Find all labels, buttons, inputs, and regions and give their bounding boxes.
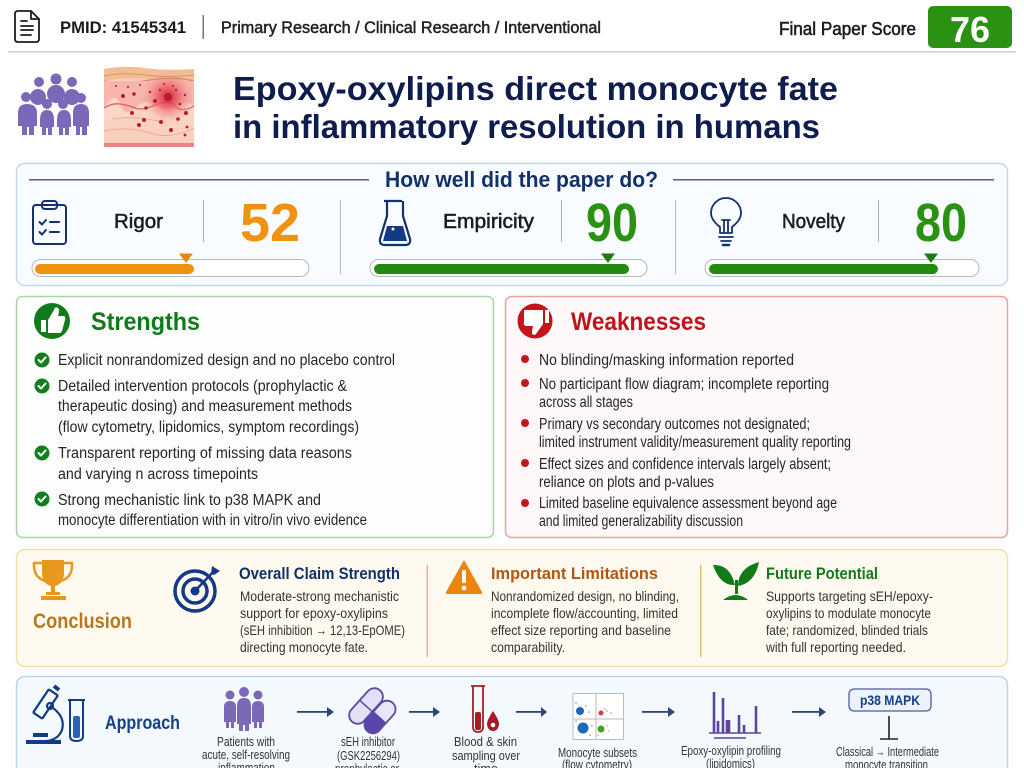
panel: conclusion bbox=[16, 550, 1008, 666]
bar: rigor bbox=[32, 254, 309, 276]
panel: weaknesses bbox=[506, 296, 1008, 538]
arrow bbox=[642, 707, 675, 717]
weaknesses heading: Weaknesses bbox=[571, 308, 706, 336]
step: sEH inhibitor bbox=[335, 685, 400, 768]
weaknesses list: limited instrument validity/measurement quality reporting bbox=[539, 434, 851, 451]
step: sEH inhibitor: sEH inhibitor bbox=[341, 735, 395, 749]
weaknesses list: Limited baseline equivalence assessment beyond age bbox=[539, 495, 837, 512]
strengths list: Strong mechanistic link to p38 MAPK and bbox=[58, 492, 321, 509]
metric: novelty: Novelty bbox=[782, 211, 845, 233]
icon: thumbs up bbox=[34, 303, 70, 339]
future potential: fate; randomized, blinded trials bbox=[766, 622, 928, 638]
arrow bbox=[792, 707, 826, 717]
overall claim strength: Moderate-strong mechanistic bbox=[240, 588, 399, 604]
arrow bbox=[409, 707, 440, 717]
overall claim strength: directing monocyte fate. bbox=[240, 639, 368, 655]
overall claim strength: support for epoxy-oxylipins bbox=[240, 605, 388, 621]
weaknesses list: No blinding/masking information reported bbox=[539, 352, 794, 369]
approach label: Approach bbox=[105, 713, 180, 734]
step: patients: Patients with bbox=[217, 735, 275, 749]
paper type: Primary Research / Clinical Research / Interventional bbox=[221, 18, 601, 37]
weaknesses list: Effect sizes and confidence intervals largely absent; bbox=[539, 456, 831, 473]
weaknesses list: across all stages bbox=[539, 394, 633, 411]
overall claim strength bbox=[239, 564, 405, 655]
step: p38 MAPK: Classical → Intermediate bbox=[836, 745, 939, 759]
strengths list: monocyte differentiation with in vitro/in vivo evidence bbox=[58, 512, 367, 529]
icon: light bulb bbox=[711, 198, 741, 245]
arrow bbox=[297, 707, 334, 717]
metric: rigor bbox=[32, 193, 309, 276]
important limitations: incomplete flow/accounting, limited bbox=[491, 605, 678, 621]
panel: scores bbox=[16, 164, 1008, 286]
icon: thumbs down bbox=[518, 304, 552, 338]
step: sEH inhibitor: (GSK2256294) bbox=[337, 749, 400, 763]
future potential: Supports targeting sEH/epoxy- bbox=[766, 588, 933, 604]
icon: warning bbox=[446, 560, 482, 594]
step: blood and skin sampling: Blood & skin bbox=[454, 735, 517, 749]
strengths heading: Strengths bbox=[91, 308, 200, 336]
bar: novelty bbox=[705, 254, 979, 276]
important limitations bbox=[491, 564, 679, 655]
score: 52: 52 bbox=[240, 193, 300, 253]
conclusion label: Conclusion bbox=[33, 610, 132, 633]
score: 90: 90 bbox=[586, 193, 638, 253]
step: lipidomics bbox=[681, 692, 781, 768]
important limitations: Important Limitations bbox=[491, 564, 658, 583]
weaknesses list: No participant flow diagram; incomplete reporting bbox=[539, 376, 829, 393]
step: p38 MAPK: p38 MAPK bbox=[860, 692, 920, 708]
icon: trophy bbox=[34, 560, 72, 600]
strengths list bbox=[34, 352, 395, 529]
overall claim strength: (sEH inhibition → 12,13-EpOME) bbox=[240, 622, 405, 638]
important limitations: comparability. bbox=[491, 639, 565, 655]
score: 80: 80 bbox=[915, 193, 967, 253]
bar: empiricity bbox=[370, 254, 647, 276]
final score label: Final Paper Score bbox=[779, 19, 916, 39]
metric: novelty bbox=[705, 193, 979, 276]
weaknesses list bbox=[521, 352, 851, 530]
step: patients bbox=[202, 687, 290, 768]
step: blood and skin sampling bbox=[452, 686, 520, 768]
strengths list: therapeutic dosing) and measurement methods bbox=[58, 398, 352, 415]
title: Epoxy-oxylipins direct monocyte fate bbox=[233, 71, 838, 108]
strengths list: and varying n across timepoints bbox=[58, 466, 258, 483]
future potential bbox=[765, 564, 933, 655]
icon: clipboard bbox=[33, 201, 66, 244]
step: p38 MAPK bbox=[836, 689, 939, 768]
final score badge: 76 bbox=[950, 9, 990, 50]
PMID: PMID: 41545341 bbox=[60, 18, 186, 37]
future potential: oxylipins to modulate monocyte bbox=[766, 605, 931, 621]
icon: target bbox=[175, 566, 220, 611]
arrow bbox=[516, 707, 547, 717]
panel: strengths bbox=[16, 296, 494, 538]
important limitations: Nonrandomized design, no blinding, bbox=[491, 588, 679, 604]
final score badge bbox=[928, 6, 1012, 50]
strengths list: (flow cytometry, lipidomics, symptom recordings) bbox=[58, 419, 359, 436]
strengths list: Detailed intervention protocols (prophylactic & bbox=[58, 378, 348, 395]
future potential: with full reporting needed. bbox=[765, 639, 906, 655]
step: blood and skin sampling: sampling over bbox=[452, 749, 520, 763]
weaknesses list: reliance on plots and p-values bbox=[539, 474, 714, 491]
icon: patient group bbox=[18, 74, 89, 135]
weaknesses list: and limited generalizability discussion bbox=[539, 513, 743, 530]
overall claim strength: Overall Claim Strength bbox=[239, 564, 400, 583]
step: patients: acute, self-resolving bbox=[202, 748, 290, 762]
step: lipidomics: Epoxy-oxylipin profiling bbox=[681, 744, 781, 758]
illustration: inflamed skin bbox=[104, 67, 195, 147]
future potential: Future Potential bbox=[766, 564, 878, 583]
title: in inflammatory resolution in humans bbox=[233, 109, 820, 146]
strengths list: Transparent reporting of missing data reasons bbox=[58, 445, 352, 462]
icon: document bbox=[15, 11, 39, 42]
strengths list: Explicit nonrandomized design and no placebo control bbox=[58, 352, 395, 369]
icon: flask bbox=[380, 201, 410, 245]
step: flow cytometry: Monocyte subsets bbox=[558, 746, 637, 760]
metric: empiricity bbox=[370, 193, 647, 276]
header bar bbox=[8, 6, 1016, 52]
important limitations: effect size reporting and baseline bbox=[491, 622, 671, 638]
weaknesses list: Primary vs secondary outcomes not designated; bbox=[539, 416, 810, 433]
metric: empiricity: Empiricity bbox=[443, 211, 534, 233]
panel: approach bbox=[16, 676, 1008, 768]
icon: sprout bbox=[713, 562, 759, 600]
title bbox=[233, 71, 838, 146]
icon: microscope and tube bbox=[26, 686, 85, 744]
metric: rigor: Rigor bbox=[114, 211, 163, 233]
step: flow cytometry bbox=[558, 694, 637, 768]
scores heading: How well did the paper do? bbox=[385, 167, 658, 192]
